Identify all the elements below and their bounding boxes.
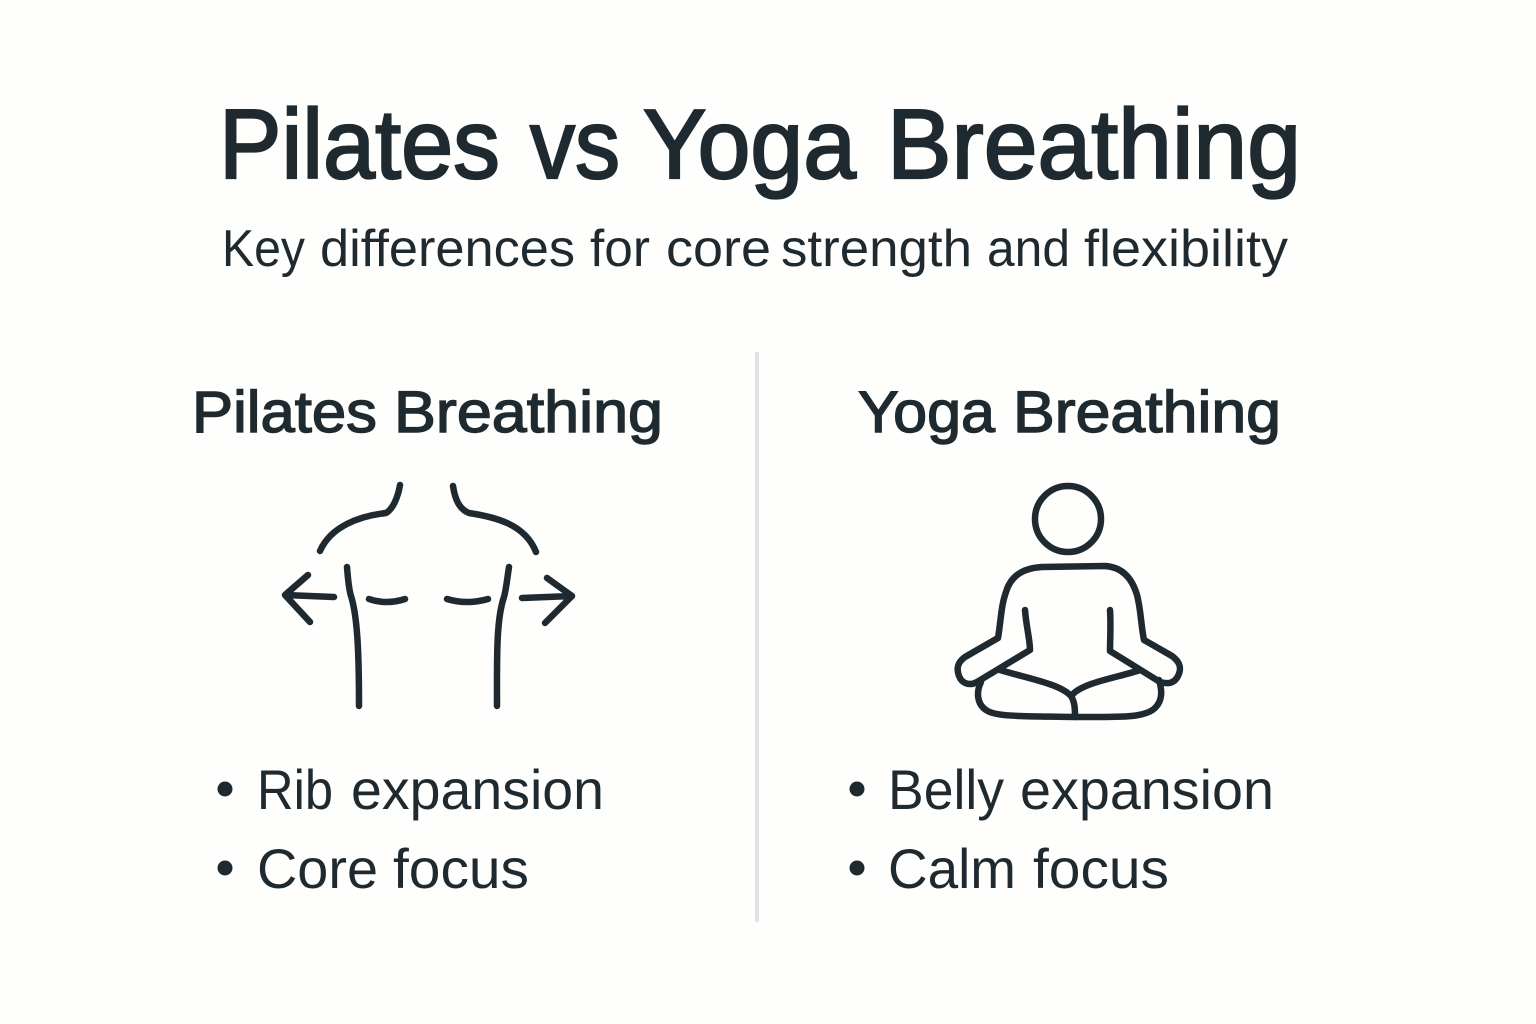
bullet list: yoga bbox=[850, 758, 1274, 900]
subtitle: differences bbox=[320, 220, 575, 278]
heading: yoga breathing: Yoga bbox=[858, 380, 996, 445]
heading: pilates breathing: Pilates bbox=[192, 380, 377, 445]
subtitle: Key bbox=[222, 220, 305, 278]
heading: pilates breathing: Breathing bbox=[394, 380, 663, 445]
title: Pilates bbox=[219, 89, 500, 199]
title: vs bbox=[530, 89, 620, 199]
subtitle: flexibility bbox=[1084, 220, 1288, 278]
bullet list: pilates bbox=[218, 758, 604, 900]
bullet list: yoga: expansion bbox=[1020, 758, 1274, 821]
title: Yoga bbox=[643, 89, 856, 199]
icon: seated meditating figure bbox=[958, 486, 1180, 717]
panel: pilates breathing bbox=[192, 380, 663, 900]
bullet list: yoga: Belly bbox=[888, 758, 1004, 821]
title: Breathing bbox=[887, 89, 1301, 199]
bullet list: pilates: expansion bbox=[351, 758, 604, 821]
subtitle: for bbox=[590, 220, 650, 278]
bullet list: pilates: Rib bbox=[257, 758, 333, 821]
bullet list: pilates: focus bbox=[393, 837, 529, 900]
panel: yoga breathing bbox=[850, 380, 1281, 900]
bullet list: pilates: Core bbox=[257, 837, 378, 900]
bullet list: yoga: focus bbox=[1033, 837, 1169, 900]
subtitle: core bbox=[666, 220, 771, 278]
subtitle: strength bbox=[781, 220, 972, 278]
bullet list: yoga: Calm bbox=[888, 837, 1016, 900]
divider between columns bbox=[755, 352, 759, 922]
subtitle: and bbox=[987, 220, 1070, 278]
heading: yoga breathing: Breathing bbox=[1013, 380, 1281, 445]
icon: rib cage expanding torso with arrows bbox=[285, 485, 572, 706]
